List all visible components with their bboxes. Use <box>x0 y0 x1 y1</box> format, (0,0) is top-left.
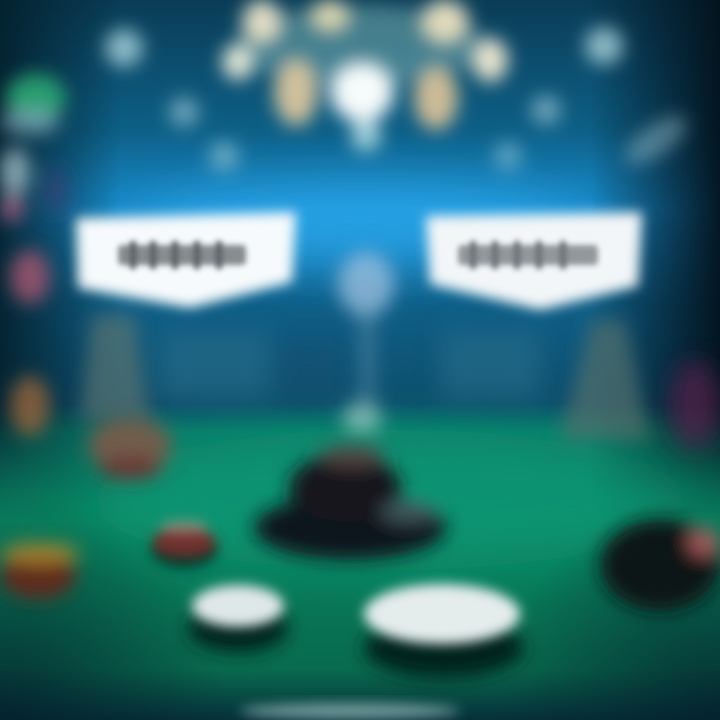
left side objects <box>0 74 67 436</box>
right black stack <box>600 519 720 611</box>
banner text smudge: right <box>458 241 598 269</box>
left tower <box>80 315 150 420</box>
small white chip <box>188 585 288 652</box>
chip stack: upper left <box>88 417 172 480</box>
chandelier <box>222 0 508 151</box>
banner text smudge: left <box>118 241 246 269</box>
large white chip <box>364 584 524 678</box>
chip stack: far left <box>0 542 80 599</box>
central black stack <box>254 444 446 560</box>
distant city skyline <box>160 330 540 400</box>
central medallion <box>338 252 394 434</box>
banner: right <box>426 212 642 310</box>
floating lights <box>105 27 694 173</box>
bottom glow <box>240 703 460 719</box>
right tower <box>560 320 650 440</box>
banner: left <box>76 212 296 308</box>
chip: mid left <box>150 520 218 568</box>
right purple object <box>670 360 720 450</box>
